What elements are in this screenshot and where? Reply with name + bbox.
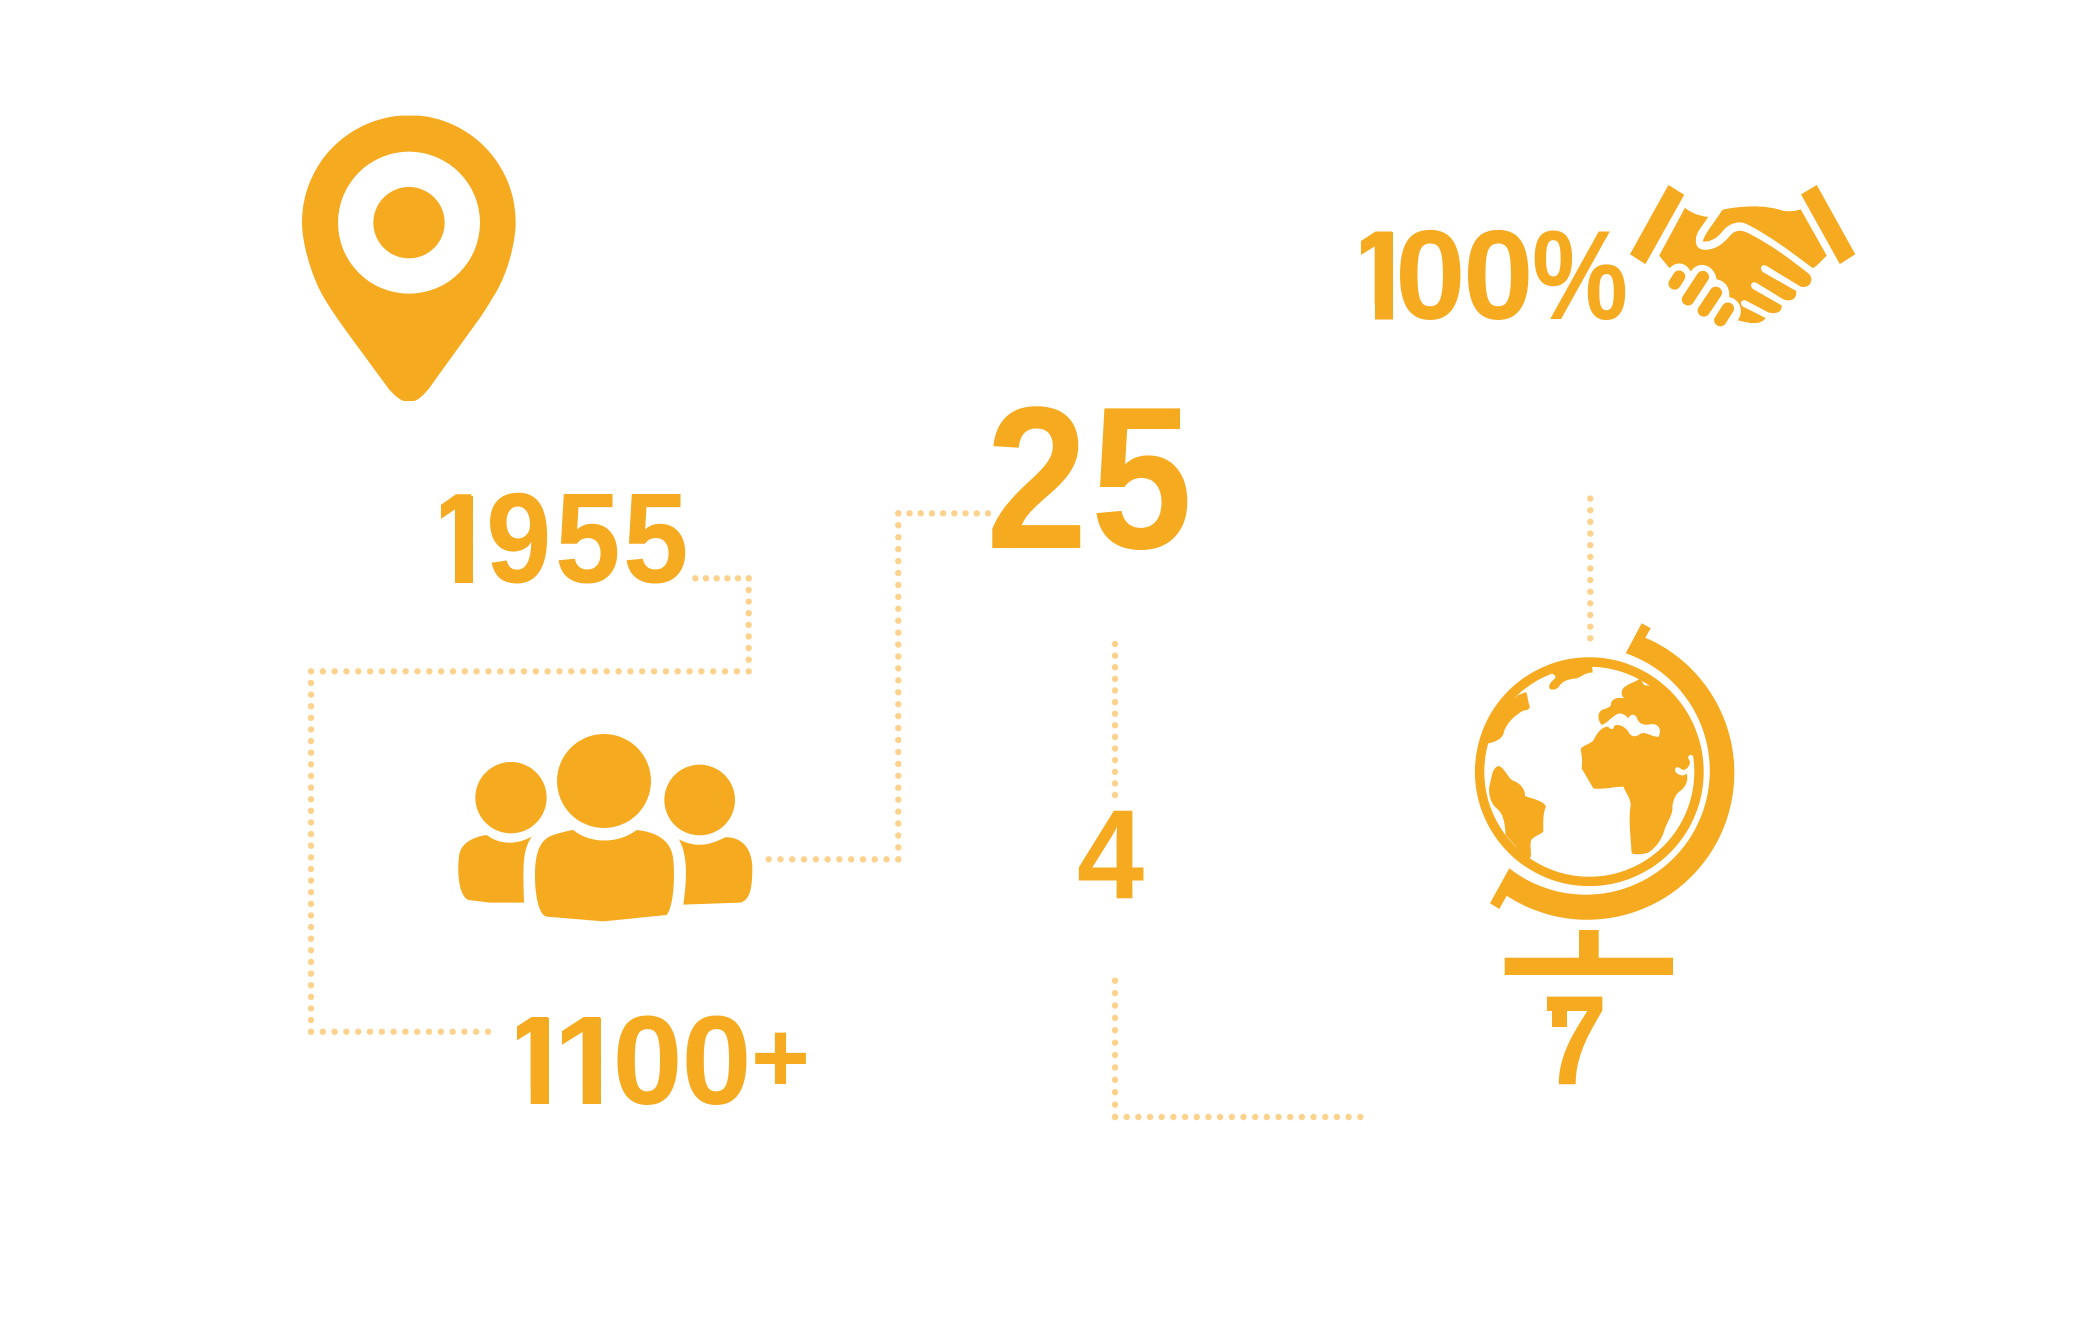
icon: people group <box>458 734 752 921</box>
number: 25: 25 <box>986 364 1192 591</box>
left hand <box>1659 208 1811 323</box>
number: 7: 7 <box>1542 969 1608 1111</box>
number: 1955: 955 <box>486 468 689 611</box>
dotted connector: 4 to 7 <box>1115 981 1361 1117</box>
stand <box>1505 958 1673 975</box>
number: 1100+: 11 <box>501 990 623 1131</box>
number: 100% <box>1336 204 1628 346</box>
dotted connector: people to 25 <box>769 513 988 859</box>
number: 1100+ <box>496 990 810 1131</box>
right hand <box>1703 206 1827 268</box>
globe ring <box>1480 662 1699 881</box>
icon: globe on stand <box>1480 623 1734 975</box>
number: 100%: 00 <box>1395 204 1534 346</box>
fingers <box>1675 277 1728 320</box>
right cuff <box>1801 185 1855 264</box>
meridian arm <box>1490 623 1734 920</box>
number: 100%: % <box>1532 204 1628 346</box>
left cuff <box>1630 185 1684 264</box>
number: 1100+: 00 <box>612 990 752 1131</box>
icon: map pin <box>302 116 516 401</box>
dotted connector: 1955 to 1100+ <box>311 578 749 1032</box>
number: 100%: 1 <box>1345 204 1416 346</box>
dotted connector: 100% to globe <box>1587 499 1594 639</box>
dotted connector: 25 to 4 <box>1112 644 1118 795</box>
number: 1955: 1 <box>428 468 493 611</box>
icon: handshake <box>1630 185 1855 323</box>
continents <box>1485 665 1703 861</box>
number: 1100+: + <box>751 1002 810 1114</box>
number: 4: 4 <box>1077 785 1144 926</box>
